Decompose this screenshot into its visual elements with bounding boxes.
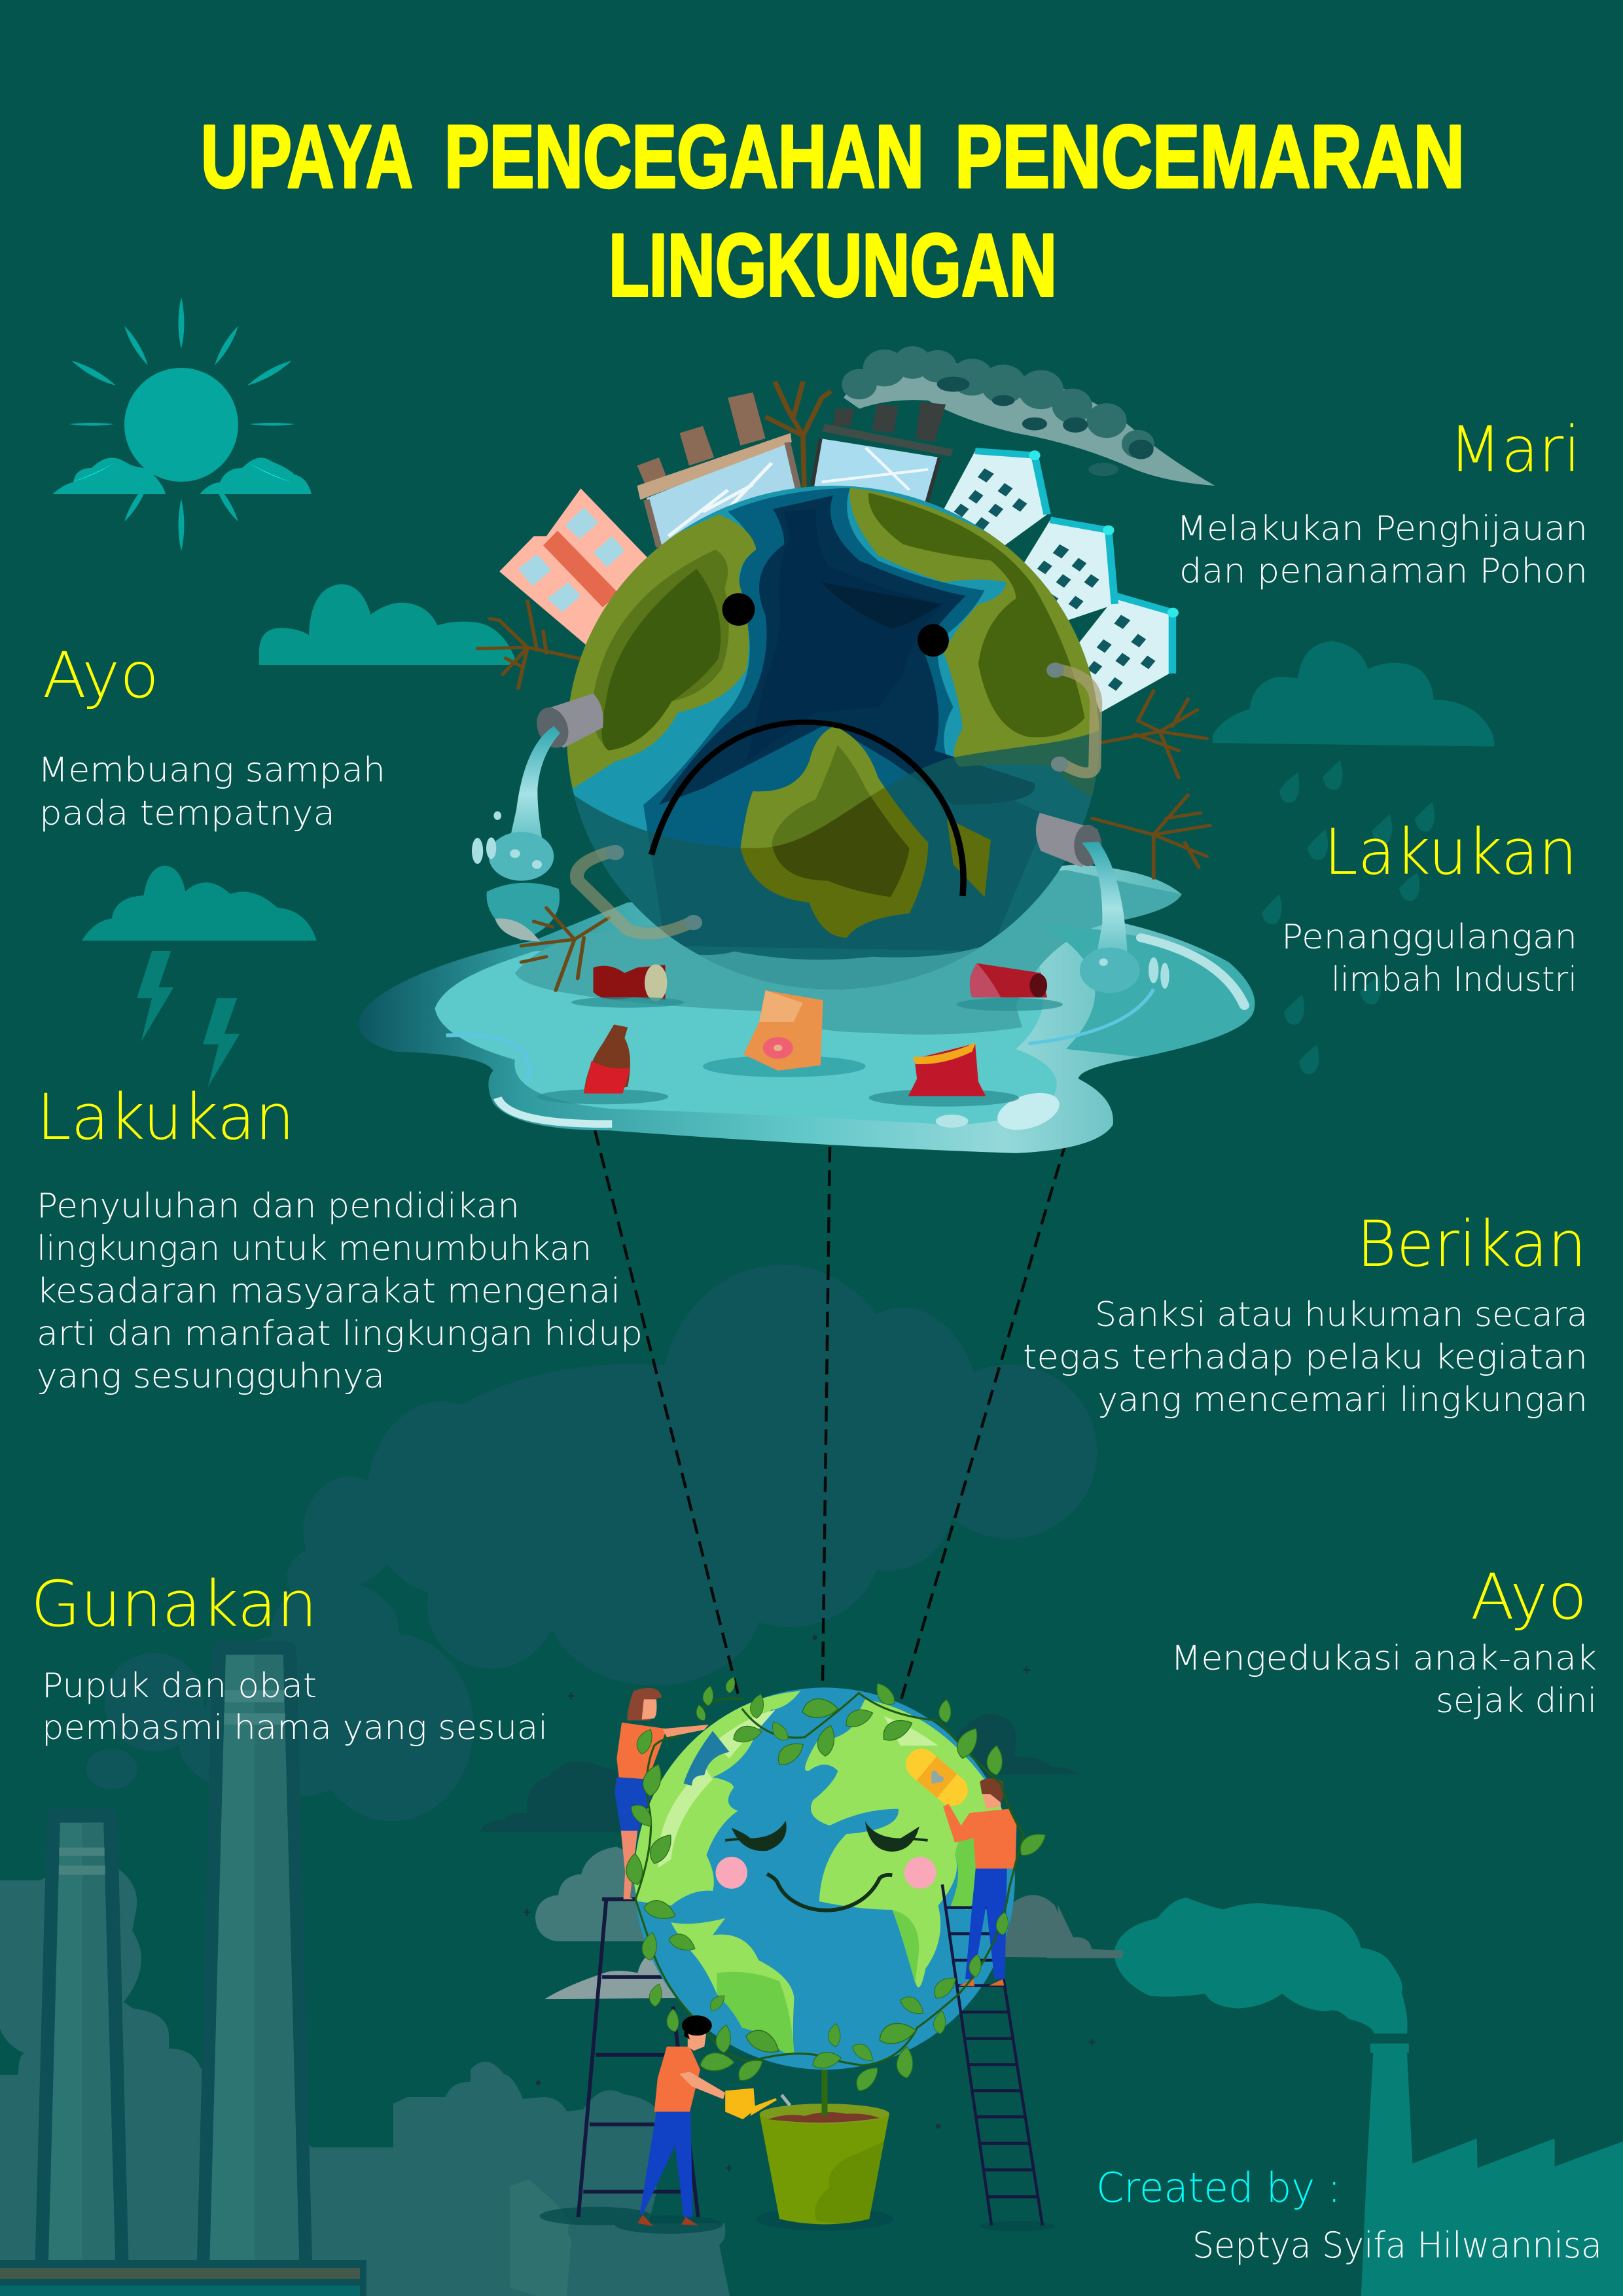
text block: Gunakan pupuk (31, 1568, 548, 1748)
author name: Septya Syifa Hilwannisa (1192, 2225, 1602, 2266)
small sparkles (524, 1635, 1096, 2172)
text block: Lakukan penanggulangan: limbah Industri (1331, 960, 1577, 999)
happy earth illustration (524, 1635, 1096, 2234)
factory base strip left (0, 2260, 366, 2296)
left ladder (579, 1899, 698, 2217)
icon: rain cloud right (1213, 641, 1495, 1074)
heading: Gunakan (31, 1568, 317, 1641)
bare tree branches (478, 601, 1210, 990)
title line 1: UPAYA (201, 107, 413, 206)
text block: Lakukan penyuluhan: yang sesungguhnya (37, 1357, 385, 1396)
heading: Lakukan (37, 1081, 294, 1154)
title line 1: PENCEGAHAN (444, 107, 924, 206)
trash: red cup (956, 963, 1063, 1011)
waste pipes (532, 662, 1101, 933)
vines and leaves (635, 1693, 1024, 2066)
text block: Ayo mengedukasi: sejak dini (1436, 1681, 1597, 1721)
text block: Lakukan penyuluhan (37, 1081, 643, 1396)
factory chimneys left (35, 1641, 312, 2261)
right ladder (942, 1884, 1043, 2225)
text block: Mari: dan penanaman Pohon (1179, 552, 1588, 591)
face: smile (767, 1874, 892, 1910)
factory silhouette: right (1114, 1897, 1623, 2296)
small grey clouds behind earth (480, 1713, 1113, 1999)
text block: Ayo mengedukasi (1171, 1560, 1597, 1721)
icon: sun (52, 297, 312, 551)
body: Membuang sampah (38, 751, 385, 790)
big dark smoke cloud behind centre (86, 1265, 1097, 1821)
grey cloud end (1047, 1905, 1123, 1958)
credit (1096, 2164, 1602, 2266)
text block: Berikan sanksi: tegas terhadap pelaku kegiatan (1023, 1338, 1588, 1377)
waterfalls from pipes (472, 726, 1169, 993)
trash: crushed can (571, 964, 684, 1008)
icon: cloud upper left (259, 584, 518, 665)
created by label: Created by : (1096, 2164, 1341, 2212)
trash: cola bottle (537, 1024, 668, 1104)
body: Mengedukasi anak-anak (1171, 1639, 1597, 1678)
bare tree top (766, 382, 831, 488)
ground shadows (539, 2207, 1055, 2234)
smoke plume (842, 346, 1215, 486)
text block: Ayo membuang sampah: pada tempatnya (39, 794, 335, 833)
title line 1 (201, 107, 1465, 206)
heading: Berikan (1357, 1208, 1586, 1281)
polluted water puddle (359, 865, 1255, 1153)
pale blue buildings (944, 450, 1179, 713)
text block: Berikan sanksi: yang mencemari lingkungan (1097, 1380, 1588, 1420)
bandage (900, 1742, 974, 1812)
body: Melakukan Penghijauan (1177, 509, 1588, 548)
heading: Ayo (1471, 1560, 1587, 1634)
heading: Ayo (43, 639, 159, 712)
text block: Lakukan penanggulangan (1281, 816, 1577, 999)
man with watering can (637, 2015, 790, 2226)
plant pot (759, 2066, 889, 2224)
sad earth globe (559, 484, 1103, 1000)
woman on left ladder (615, 1688, 709, 1899)
title line 2: LINGKUNGAN (609, 215, 1057, 315)
heading: Lakukan (1324, 816, 1577, 889)
smiling earth globe (633, 1687, 1018, 2070)
factory with brown chimneys (637, 392, 798, 547)
title (201, 107, 1465, 315)
trash: chips packet (868, 1043, 1019, 1107)
body: Pupuk dan obat (42, 1666, 317, 1706)
heading: Mari (1449, 413, 1580, 486)
man on right ladder (943, 1778, 1016, 1986)
body: Sanksi atau hukuman secara (1095, 1295, 1588, 1335)
text block: Lakukan penyuluhan: arti dan manfaat lingkungan hidup (37, 1314, 643, 1354)
face: eyes (725, 1821, 928, 1852)
text block: Lakukan penyuluhan: lingkungan untuk menumbuhkan (37, 1229, 592, 1268)
title line 1: PENCEMARAN (955, 107, 1465, 206)
icon: storm cloud with lightning (82, 866, 317, 1086)
factory with grey chimneys (812, 402, 954, 502)
dashed connector lines (595, 1130, 1066, 1700)
peach building (499, 488, 648, 646)
polluted earth illustration (359, 346, 1255, 1153)
text block: Mari (1177, 413, 1588, 591)
text block: Gunakan pupuk: pembasmi hama yang sesuai (42, 1708, 548, 1748)
text block: Lakukan penyuluhan: kesadaran masyarakat mengenai (37, 1272, 620, 1311)
text block: Ayo membuang sampah (38, 639, 385, 833)
lighter strip and pedestal silhouette (510, 2179, 730, 2296)
factory silhouette: lower left smoke (0, 1865, 661, 2296)
text block: Berikan sanksi (1023, 1208, 1588, 1420)
trash: paper bag with donut (703, 990, 866, 1077)
body: Penanggulangan (1281, 918, 1577, 957)
body: Penyuluhan dan pendidikan (37, 1187, 520, 1226)
face: cheeks (716, 1857, 936, 1889)
